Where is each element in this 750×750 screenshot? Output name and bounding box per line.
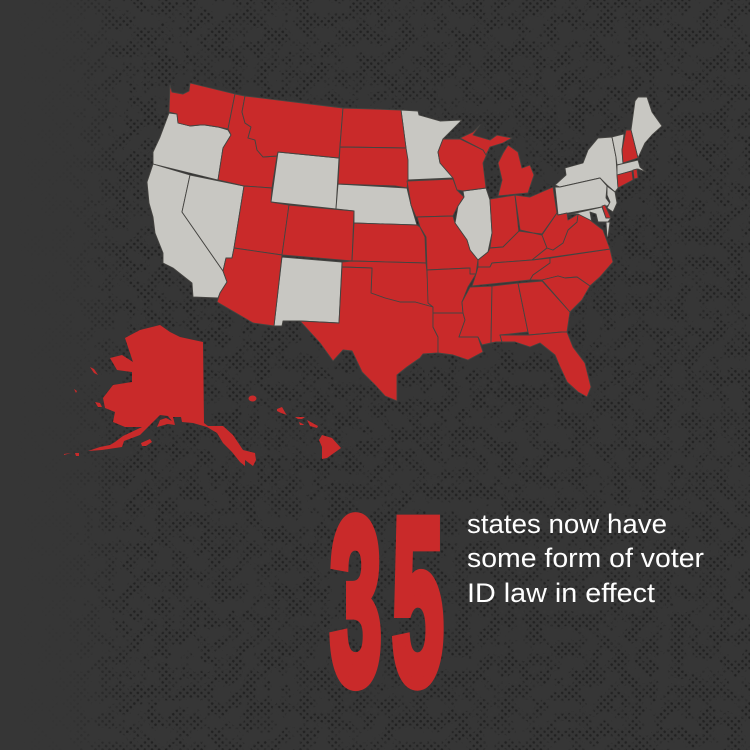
Virginia eastern shore — [606, 222, 610, 237]
state: Hawaii — [248, 396, 341, 459]
state: Ohio — [515, 187, 557, 234]
state: Louisiana — [433, 313, 483, 360]
state: Georgia — [518, 281, 570, 335]
state: Washington — [169, 83, 235, 129]
caption text: some form of voter — [467, 543, 704, 573]
state: Arkansas — [427, 268, 476, 313]
state: Maryland — [567, 207, 611, 223]
state: Nebraska — [336, 184, 417, 225]
state: Michigan upper peninsula — [460, 125, 512, 155]
state: Connecticut — [617, 171, 633, 188]
state: New Mexico — [274, 257, 342, 326]
state: Idaho — [218, 94, 277, 188]
state: Texas — [300, 267, 438, 401]
state: Oregon — [153, 113, 231, 180]
state: Wyoming — [271, 152, 339, 209]
state: West Virginia — [542, 213, 578, 250]
states with voter ID law (red) — [169, 83, 638, 401]
state: California — [147, 164, 227, 298]
state: Massachusetts — [617, 160, 646, 175]
state: Maine — [631, 97, 662, 158]
state: Utah — [234, 186, 289, 255]
state: Indiana — [490, 195, 519, 248]
state: Vermont — [612, 134, 624, 165]
state: New Jersey — [607, 186, 617, 212]
state: South Carolina — [542, 276, 590, 312]
state: Delaware — [602, 205, 611, 218]
caption text: states now have — [467, 509, 667, 539]
state: Kentucky — [478, 231, 547, 267]
state: Minnesota — [401, 110, 462, 180]
state: South Dakota — [338, 147, 408, 188]
state: New York — [555, 137, 618, 192]
state: Michigan lower peninsula — [498, 145, 534, 196]
state: Tennessee — [472, 258, 550, 286]
big number 35 — [330, 470, 444, 732]
state: Pennsylvania — [555, 178, 611, 215]
state: Alaska — [64, 325, 256, 466]
state: Wisconsin — [438, 139, 490, 191]
state: Mississippi — [459, 286, 492, 345]
caption text — [467, 509, 704, 608]
state: Virginia — [532, 214, 610, 260]
state: North Carolina — [530, 249, 613, 286]
state: Missouri — [417, 216, 478, 274]
state: Kansas — [352, 223, 426, 263]
state: Rhode Island — [633, 169, 638, 179]
state: Colorado — [282, 205, 354, 261]
caption text: ID law in effect — [467, 578, 656, 608]
state: Oklahoma — [342, 261, 433, 307]
big number 35: 3 — [330, 470, 382, 732]
state: New Hampshire — [622, 130, 638, 163]
state: Florida — [500, 332, 591, 397]
big number 35: 5 — [392, 470, 444, 732]
map of the United States — [64, 83, 662, 466]
state: Montana — [242, 96, 343, 158]
state: Illinois — [455, 188, 492, 260]
state: Nevada — [182, 175, 244, 271]
state: Arizona — [217, 248, 282, 326]
states without voter ID law (grey) — [147, 97, 662, 326]
state: North Dakota — [340, 108, 406, 148]
state: Alabama — [491, 283, 528, 343]
state: Iowa — [407, 179, 464, 217]
